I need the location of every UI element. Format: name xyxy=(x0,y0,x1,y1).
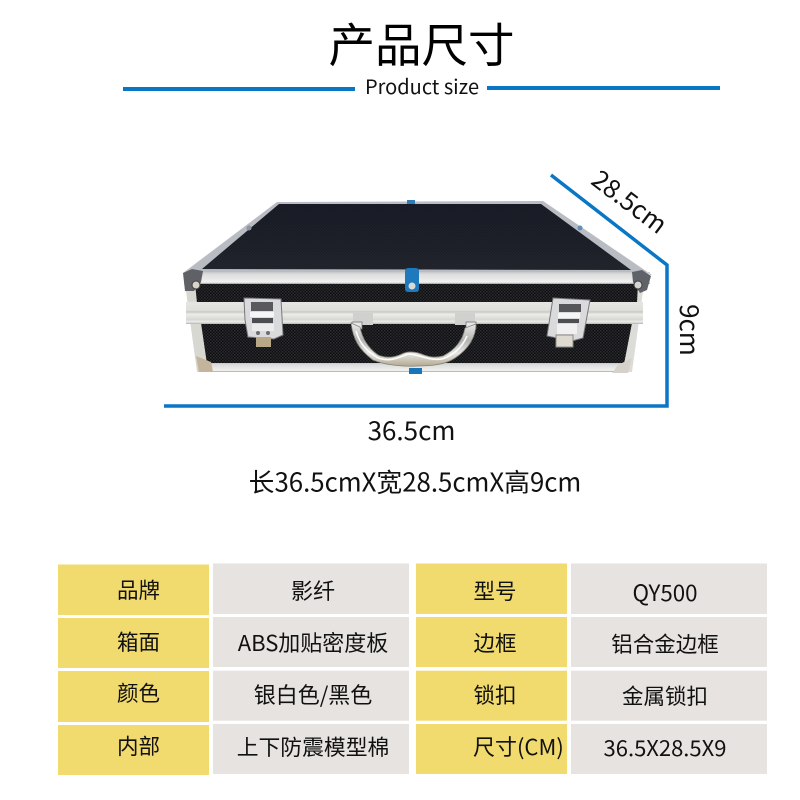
upper trim xyxy=(184,272,650,284)
row: interior and size: 36.5X28.5X9 xyxy=(604,731,726,763)
row: brand and model: 影纤 xyxy=(291,574,335,606)
row: brand and model xyxy=(58,564,767,615)
row: interior and size: 尺寸(CM) xyxy=(473,730,564,762)
subtitle divider: Product size: Product size xyxy=(365,71,479,100)
row: surface and frame: 箱面 xyxy=(117,626,160,657)
case lid xyxy=(183,200,652,275)
row: surface and frame: 边框 xyxy=(473,627,517,658)
subtitle divider: Product size xyxy=(123,71,720,100)
row: colour and lock: 颜色 xyxy=(117,677,160,708)
case silver side trims xyxy=(185,284,644,372)
middle trim xyxy=(186,302,643,324)
bottom trim xyxy=(207,363,627,372)
row: brand and model: 型号 xyxy=(473,575,517,606)
row: interior and size xyxy=(58,724,767,775)
aluminium case photo illustration xyxy=(183,200,652,374)
right latch xyxy=(547,298,590,347)
row: colour and lock xyxy=(58,671,767,722)
dimension label: depth: 28.5cm xyxy=(585,160,676,241)
spec table xyxy=(58,564,767,775)
row: interior and size: 内部 xyxy=(117,730,160,761)
handle xyxy=(351,313,476,366)
case front panels xyxy=(195,283,638,364)
row: surface and frame xyxy=(58,617,767,668)
left latch xyxy=(244,298,283,347)
title: 产品尺寸 xyxy=(328,9,514,76)
row: brand and model: QY500 xyxy=(632,576,698,608)
blue clips xyxy=(405,268,422,374)
row: brand and model: 品牌 xyxy=(117,574,160,605)
size summary text: 长36.5cmX宽28.5cmX高9cm xyxy=(249,462,581,500)
dimension label: height: 9cm xyxy=(672,304,709,356)
row: surface and frame: 铝合金边框 xyxy=(611,628,719,659)
row: interior and size: 上下防震模型棉 xyxy=(237,731,389,762)
row: colour and lock: 金属锁扣 xyxy=(622,680,708,711)
dimension lines xyxy=(164,175,667,406)
row: surface and frame: ABS加贴密度板 xyxy=(238,626,388,658)
dimension label: length: 36.5cm xyxy=(368,411,455,448)
row: colour and lock: 锁扣 xyxy=(473,679,517,710)
row: colour and lock: 银白色/黑色 xyxy=(254,678,372,710)
corner brackets xyxy=(183,269,651,373)
